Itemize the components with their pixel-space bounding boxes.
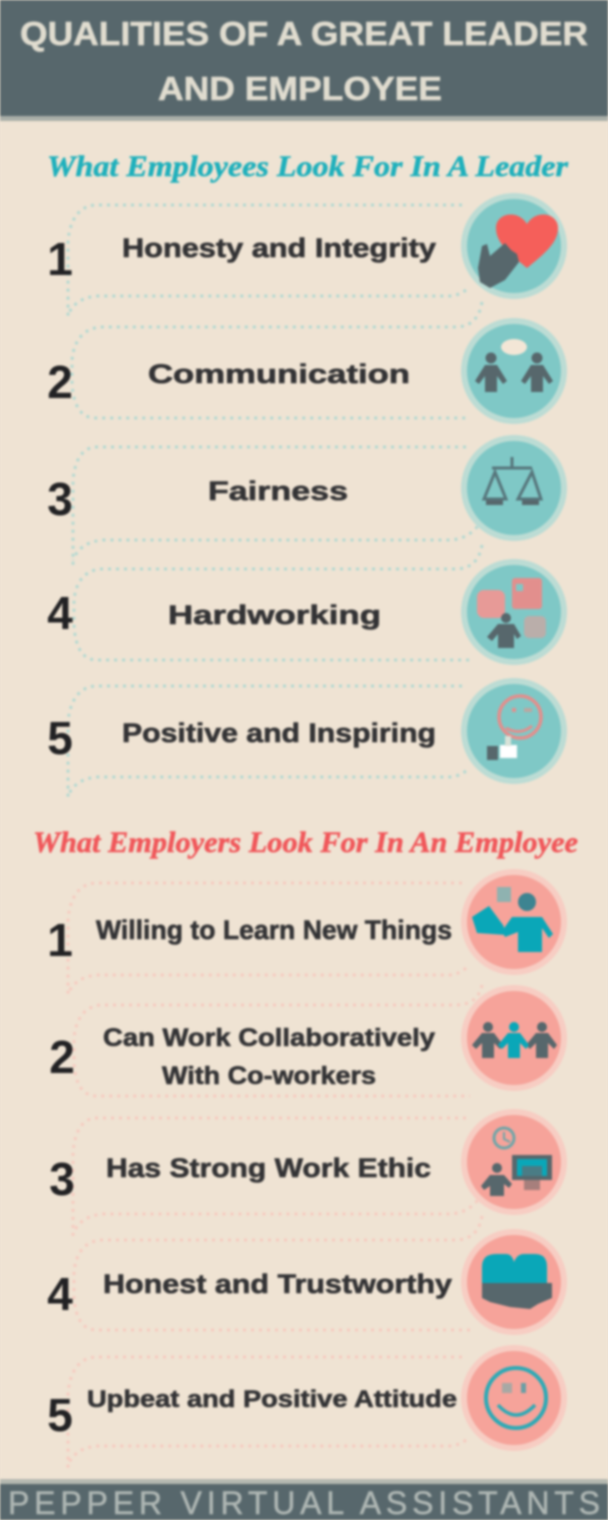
panel: employee quality 2: 2 xyxy=(49,1031,75,1083)
header banner: AND EMPLOYEE xyxy=(158,70,442,107)
panel: employee quality 3: 3 xyxy=(49,1153,75,1205)
panel: employee quality 3: Has Strong Work Ethic xyxy=(106,1153,431,1183)
panel: leader quality 2: Communication xyxy=(148,359,410,389)
icon: person at computer with clock xyxy=(461,1109,567,1215)
panel: employee quality 1: Willing to Learn New Things xyxy=(96,915,452,945)
panel: employee quality 2: Can Work Collaboratively xyxy=(103,1024,435,1052)
panel: leader quality 3: 3 xyxy=(47,473,73,525)
panel: employee quality 5: 5 xyxy=(47,1389,73,1441)
panel: leader quality 1: Honesty and Integrity xyxy=(122,233,436,263)
icon: scales xyxy=(461,435,567,541)
panel: leader quality 5: 5 xyxy=(47,712,73,764)
panel: employee quality 4 xyxy=(47,1216,567,1335)
panel: leader quality 4: Hardworking xyxy=(168,600,381,630)
panel: leader quality 2 xyxy=(47,302,567,424)
header banner: QUALITIES OF A GREAT LEADER xyxy=(20,15,588,52)
panel: employee quality 5: Upbeat and Positive Attitude xyxy=(87,1386,457,1413)
panel: employee quality 1 xyxy=(47,869,567,998)
panel: employee quality 5 xyxy=(47,1345,567,1472)
icon: worker with puzzle pieces xyxy=(461,559,567,665)
panel: leader quality 5: Positive and Inspiring xyxy=(122,718,436,748)
icon: two people talking xyxy=(461,318,567,424)
icon: three co-workers xyxy=(461,985,567,1091)
heading: what employers look for in an employee: What Employers Look For In An Employee xyxy=(33,826,578,859)
header banner xyxy=(0,0,608,121)
panel: leader quality 2: 2 xyxy=(47,356,73,408)
panel: employee quality 2: With Co-workers xyxy=(162,1062,376,1090)
panel: leader quality 5 xyxy=(47,678,567,801)
icon: heart and hand xyxy=(461,193,567,299)
footer banner: PEPPER VIRTUAL ASSISTANTS xyxy=(8,1485,600,1520)
panel: leader quality 3 xyxy=(47,435,567,566)
panel: leader quality 1 xyxy=(47,193,567,320)
icon: smiley xyxy=(461,1345,567,1451)
panel: employee quality 4: Honest and Trustworthy xyxy=(103,1269,452,1299)
panel: employee quality 4: 4 xyxy=(47,1268,73,1320)
panel: leader quality 3: Fairness xyxy=(208,476,348,506)
panel: leader quality 4: 4 xyxy=(47,587,73,639)
icon: heart and handshake xyxy=(461,1229,567,1335)
panel: employee quality 3 xyxy=(49,1109,567,1240)
icon: person with book xyxy=(461,869,567,975)
panel: employee quality 2 xyxy=(49,985,567,1096)
panel: leader quality 4 xyxy=(47,545,567,665)
heading: what employees look for in a leader: What Employees Look For In A Leader xyxy=(47,150,568,183)
panel: leader quality 1: 1 xyxy=(47,233,73,285)
panel: employee quality 1: 1 xyxy=(47,914,73,966)
icon: smiley and thumbs up xyxy=(461,678,567,784)
